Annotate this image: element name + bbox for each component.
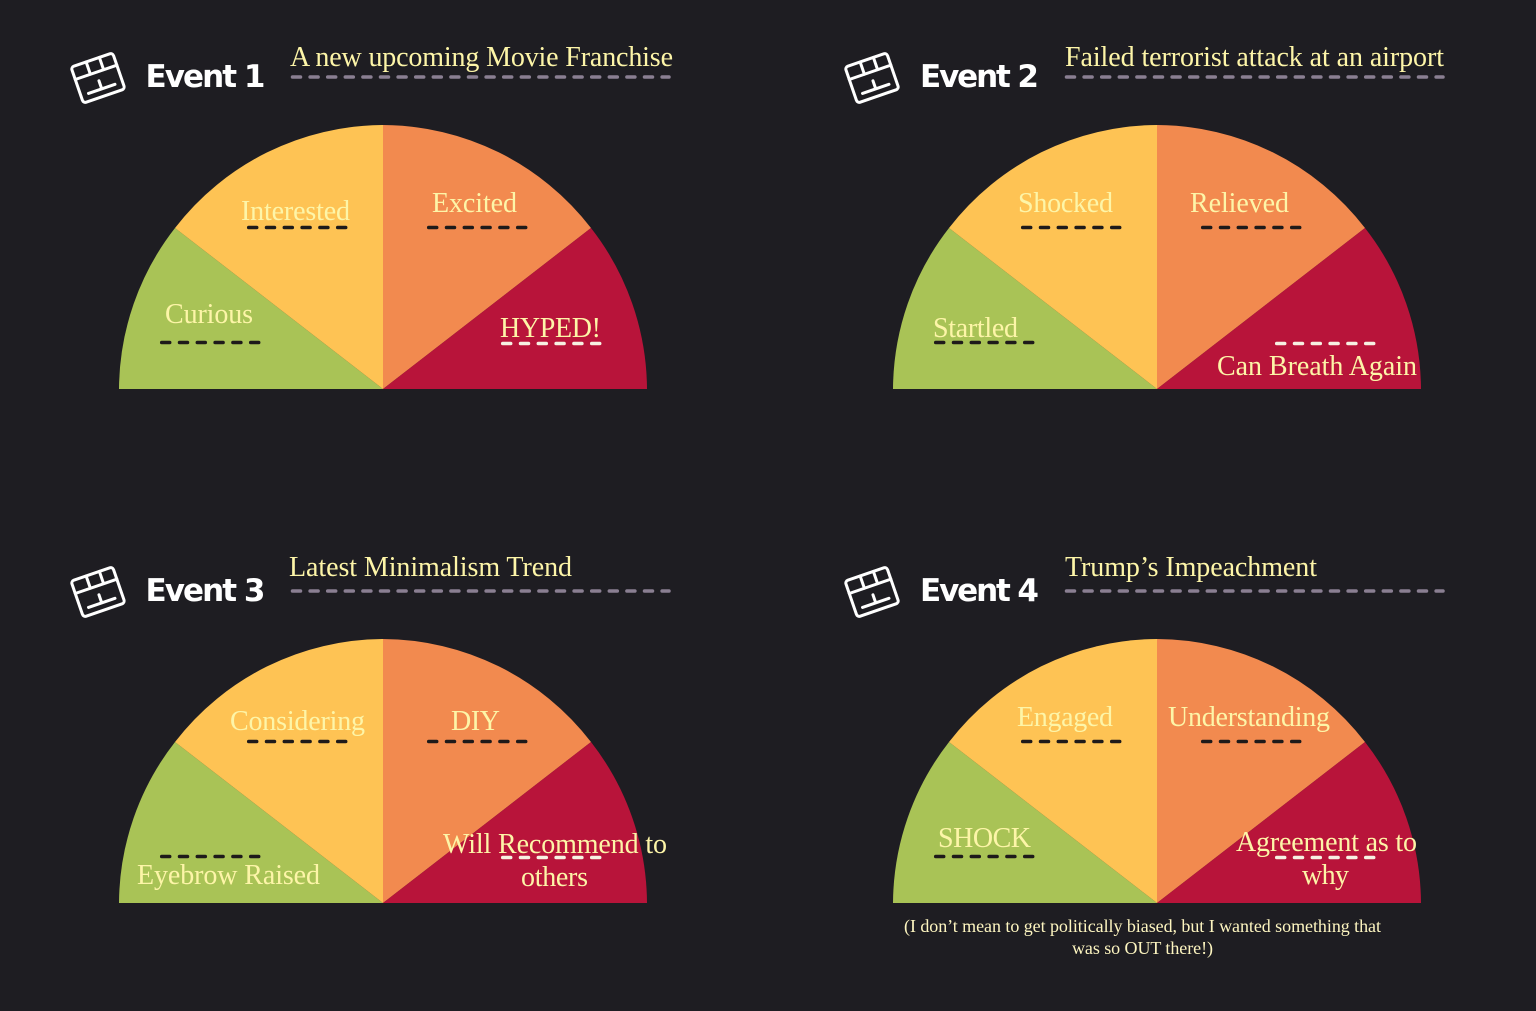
footnote bbox=[904, 916, 1381, 959]
label: agreement as to why: Agreement as to bbox=[1236, 827, 1417, 858]
label: curious: Curious bbox=[165, 299, 253, 330]
subtitle underline: event 4 bbox=[1066, 589, 1443, 593]
label: hyped: HYPED! bbox=[500, 313, 601, 344]
segment: can breath again bbox=[1157, 228, 1421, 389]
segment: agreement bbox=[1157, 742, 1421, 903]
label: agreement as to why: why bbox=[1302, 860, 1349, 891]
label: can breath again: Can Breath Again bbox=[1217, 351, 1417, 382]
subtitle: event 4: Trump’s Impeachment bbox=[1065, 552, 1317, 583]
label: understanding: Understanding bbox=[1168, 702, 1330, 733]
panel: event 2 bbox=[845, 42, 1444, 389]
label: diy: DIY bbox=[451, 706, 500, 737]
label: will recommend to others: others bbox=[521, 862, 588, 893]
segment: eyebrow raised bbox=[119, 742, 383, 903]
gauge: event 2 bbox=[893, 125, 1421, 389]
subtitle underline: event 3 bbox=[292, 589, 669, 593]
label: engaged: Engaged bbox=[1017, 702, 1113, 733]
segment: shocked bbox=[949, 125, 1157, 389]
heading: event 4: Event 4 bbox=[920, 573, 1039, 609]
icon: clapperboard event 4 bbox=[845, 567, 899, 617]
subtitle underline: event 1 bbox=[292, 75, 669, 79]
heading: event 3: Event 3 bbox=[146, 573, 266, 609]
label: eyebrow raised: Eyebrow Raised bbox=[137, 860, 320, 891]
label: shocked: Shocked bbox=[1018, 188, 1113, 219]
footnote: (I don’t mean to get politically biased, but I wanted something that bbox=[904, 916, 1381, 937]
label: excited: Excited bbox=[432, 188, 517, 219]
icon: clapperboard event 2 bbox=[845, 53, 899, 103]
gauge: event 4 bbox=[893, 639, 1421, 903]
subtitle: event 2: Failed terrorist attack at an airport bbox=[1065, 42, 1444, 73]
subtitle underline: event 2 bbox=[1066, 75, 1443, 79]
gauge: event 3 bbox=[119, 639, 667, 903]
segment: will recommend bbox=[383, 742, 647, 903]
heading: event 2: Event 2 bbox=[920, 59, 1039, 95]
icon: clapperboard event 1 bbox=[71, 53, 125, 103]
label: interested: Interested bbox=[241, 196, 350, 227]
label: startled: Startled bbox=[933, 313, 1018, 344]
icon: clapperboard event 3 bbox=[71, 567, 125, 617]
segment: interested bbox=[175, 125, 383, 389]
subtitle: event 3: Latest Minimalism Trend bbox=[289, 552, 572, 583]
heading: event 1: Event 1 bbox=[146, 59, 266, 95]
segment: curious bbox=[119, 228, 383, 389]
segment: hyped bbox=[383, 228, 647, 389]
label: relieved: Relieved bbox=[1190, 188, 1289, 219]
panel: event 3 bbox=[71, 552, 669, 903]
label: will recommend to others bbox=[443, 829, 667, 893]
panel: event 4 bbox=[845, 552, 1443, 959]
segment: shock bbox=[893, 742, 1157, 903]
segment: understanding bbox=[1157, 639, 1365, 903]
label: agreement as to why bbox=[1236, 827, 1417, 891]
label: will recommend to others: Will Recommend to bbox=[443, 829, 667, 860]
segment: considering bbox=[175, 639, 383, 903]
segment: startled bbox=[893, 228, 1157, 389]
panel: event 1 bbox=[71, 42, 673, 389]
label: shock: SHOCK bbox=[938, 823, 1031, 854]
footnote: was so OUT there!) bbox=[1072, 938, 1213, 959]
segment: excited bbox=[383, 125, 591, 389]
segment: relieved bbox=[1157, 125, 1365, 389]
label: considering: Considering bbox=[230, 706, 365, 737]
segment: diy bbox=[383, 639, 591, 903]
segment: engaged bbox=[949, 639, 1157, 903]
gauge: event 1 bbox=[119, 125, 647, 389]
subtitle: event 1: A new upcoming Movie Franchise bbox=[290, 42, 673, 73]
